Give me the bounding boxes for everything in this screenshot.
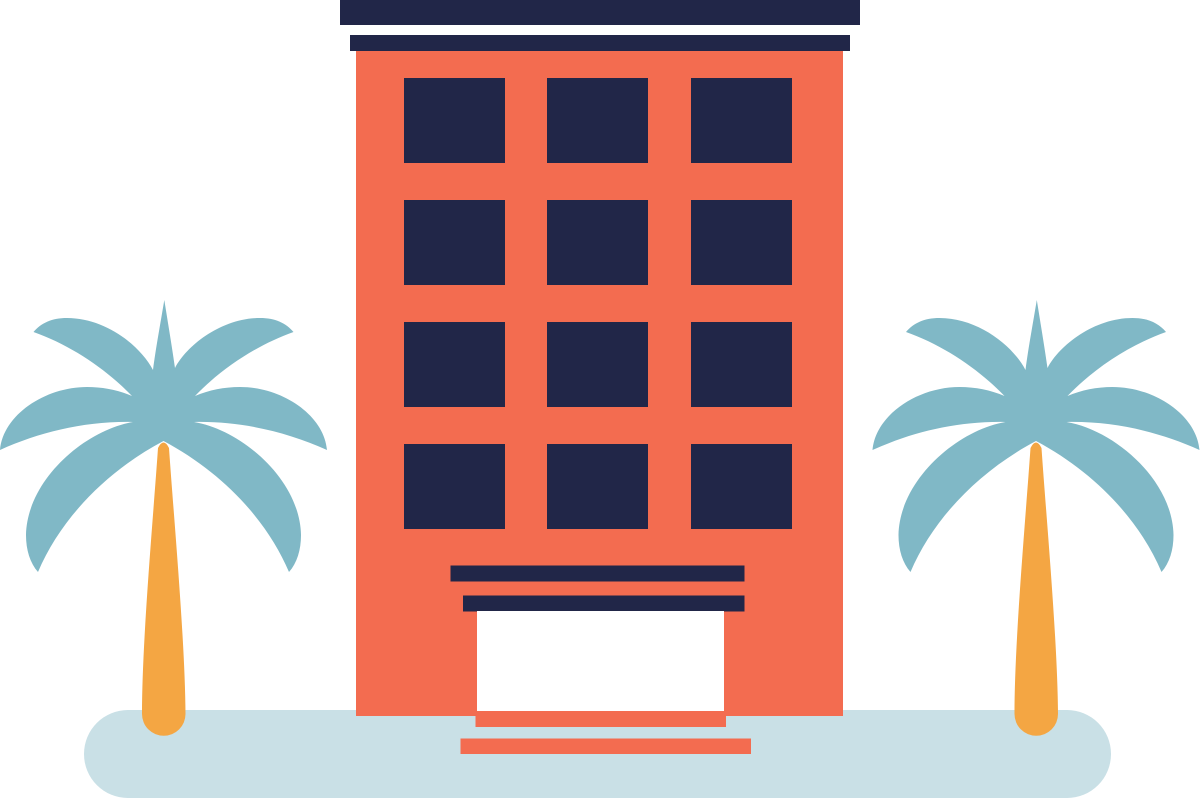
right palm tree	[872, 300, 1200, 736]
upper entrance step	[476, 712, 726, 727]
right palm fronds	[872, 300, 1200, 572]
lower entrance step	[460, 738, 751, 754]
entrance canopy upper bar	[450, 566, 744, 582]
building facade	[356, 50, 843, 716]
left palm fronds	[0, 300, 327, 572]
entrance canopy lower bar	[463, 596, 744, 612]
roof cornice	[350, 35, 850, 51]
left palm trunk	[142, 442, 186, 736]
left palm tree	[0, 300, 327, 736]
ground strip	[84, 710, 1111, 798]
entrance doorway	[477, 611, 724, 711]
hotel building	[340, 0, 860, 754]
right palm trunk	[1014, 442, 1058, 736]
window grid	[404, 78, 792, 529]
roof slab	[340, 0, 860, 25]
